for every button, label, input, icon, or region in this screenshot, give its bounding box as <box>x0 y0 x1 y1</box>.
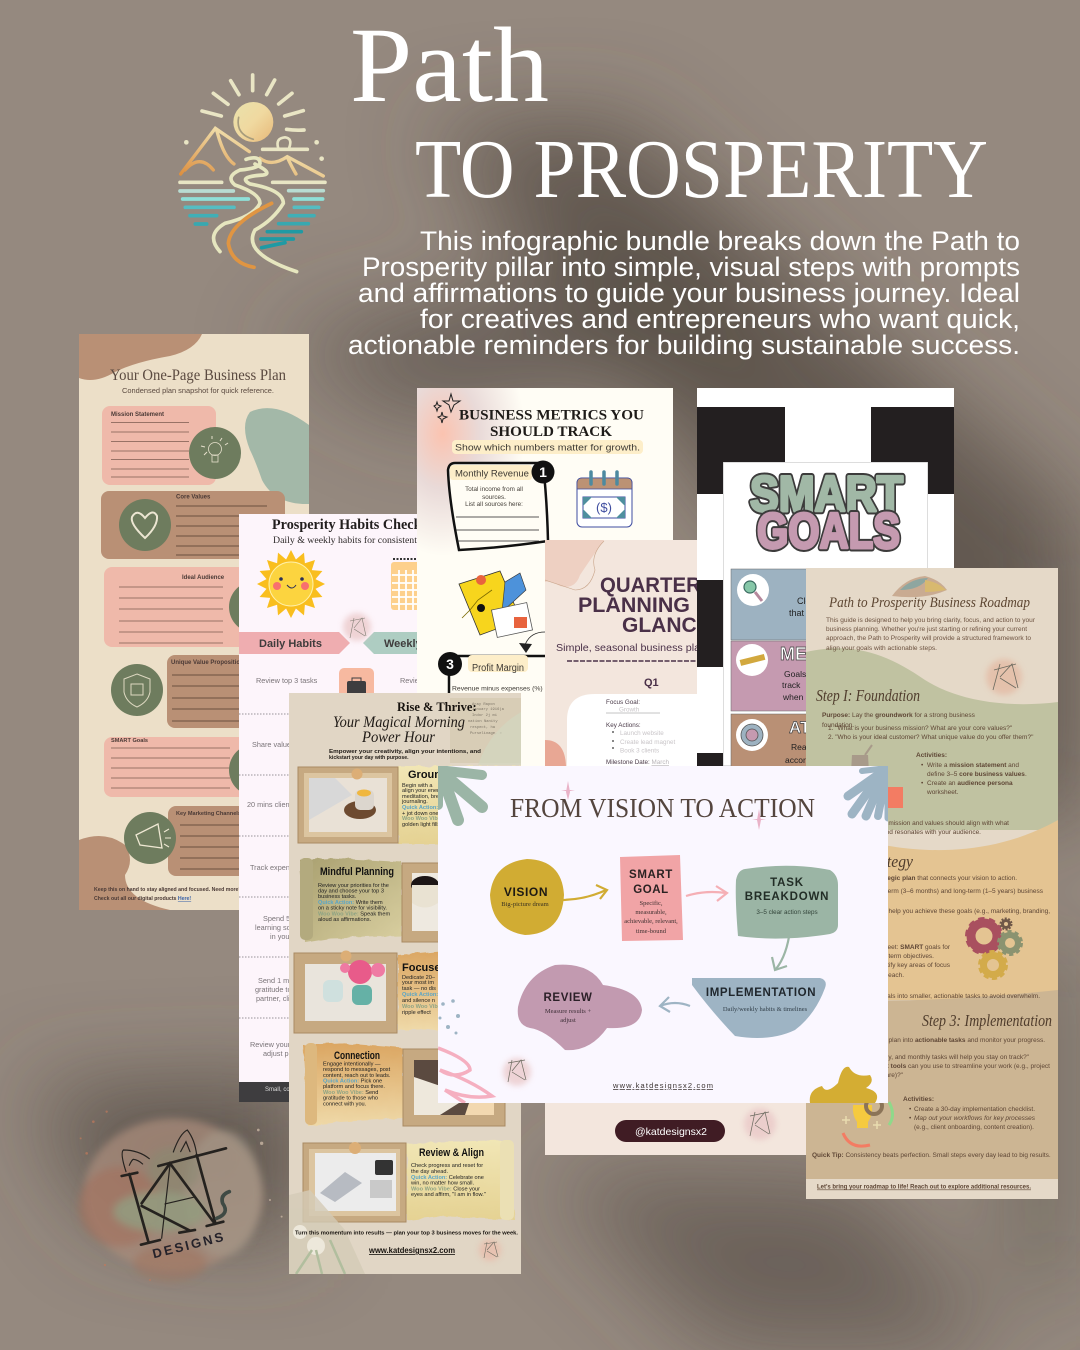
section: mindful planning <box>300 858 521 942</box>
roadmap introduction: approach, the Path to Prosperity will provide a structured framework to <box>826 635 1031 642</box>
vintage paper and leaf corner: respect, ha <box>470 725 496 730</box>
title: Path: Path <box>350 7 549 125</box>
arrow to step three <box>519 632 545 653</box>
intro paragraph <box>348 226 1020 360</box>
panel: business metrics you should track: BUSINESS METRICS YOU <box>459 408 644 424</box>
icon: smiling sun <box>257 550 325 618</box>
measurable row <box>730 640 806 712</box>
section: focused work: task — no dis <box>402 986 436 992</box>
section: review and align <box>303 1140 515 1222</box>
section: grounding: align your energy <box>402 788 445 794</box>
panel: one-page business plan: Your One-Page Business Plan <box>110 367 286 384</box>
heading: FROM VISION TO ACTION <box>510 793 815 823</box>
step 2 text: Set short-term (3–6 months) and long-term (1–5 years) business <box>858 888 1044 895</box>
section: review and align: Review & Align <box>419 1147 484 1159</box>
core values box: Core Values <box>176 494 211 500</box>
step 3 text <box>812 1037 1051 1159</box>
panel: business metrics you should track <box>417 388 673 714</box>
decorative blue dots <box>438 999 460 1034</box>
section: grounding: meditation, breath <box>402 794 447 800</box>
step: review: adjust <box>560 1017 576 1024</box>
step: vision: VISION <box>504 885 548 899</box>
metric 1: monthly revenue <box>448 460 554 550</box>
step 3 text: Purpose: Turn your plan into actionable tasks and monitor your progress. <box>831 1037 1045 1044</box>
heading <box>329 700 481 761</box>
smart goals box: SMART Goals <box>111 738 148 744</box>
panel: prosperity habits checklist: Prosperity Habits Checklist <box>272 517 440 533</box>
step 3 heading: Step 3: Implementation <box>922 1011 1052 1030</box>
step: smart goal: time-bound <box>636 928 667 935</box>
step: vision: Big-picture dream <box>501 901 549 908</box>
panel: rise and thrive morning power hour <box>289 693 521 1274</box>
heading: GLANCE <box>622 614 711 637</box>
section: connection: platform and focus there. <box>323 1084 385 1090</box>
section: grounding: Woo Woo Vibe: <box>402 816 443 822</box>
section: grounding: golden light fills <box>402 822 440 828</box>
watermark logo <box>343 613 371 641</box>
arrow: vision to smart goal <box>560 885 607 900</box>
roadmap footer link: Let's bring your roadmap to life! Reach out to explore additional resources. <box>817 1184 1031 1190</box>
metric 1: monthly revenue: sources. <box>482 494 506 501</box>
panel: black and white blocks <box>697 388 954 767</box>
habit list: learning something <box>255 923 317 932</box>
decorative green splash <box>438 770 482 820</box>
section: mindful planning: Review your priorities for the <box>318 883 389 889</box>
quarter details: Book 3 clients <box>620 748 659 754</box>
heading: Rise & Thrive: <box>397 700 477 714</box>
heading: SMART GOALS: GOALS <box>757 503 900 559</box>
section: focused work <box>294 950 521 1033</box>
core values box <box>101 491 285 559</box>
habit list: partner, client <box>256 994 300 1003</box>
heading: PLANNING <box>578 594 690 617</box>
habit list: Share value <box>252 740 291 749</box>
heading: SMART GOALS: SMART <box>750 466 903 522</box>
section: connection: respond to messages, post <box>323 1067 391 1073</box>
habit list: in your <box>270 932 292 941</box>
step 3 text: Map out your workflows for key processes <box>914 1115 1036 1122</box>
section: connection: Quick Action: Pick one <box>323 1078 382 1084</box>
panel: quarterly planning lower part <box>545 1100 806 1155</box>
section: focused work: ripple effect <box>402 1010 431 1016</box>
step: implementation: Daily/weekly habits & timelines <box>723 1006 808 1013</box>
mission statement box: Mission Statement <box>111 412 164 418</box>
section: grounding: Begin with a <box>402 783 433 789</box>
arrow: smart goal to task breakdown <box>686 886 727 901</box>
step 2 text: Identify key areas of focus <box>874 962 951 969</box>
step 1 text: Write a mission statement and <box>927 762 1019 769</box>
social handle pill <box>615 1120 725 1142</box>
section: grounding: + jot down one <box>402 811 439 817</box>
metric 1: monthly revenue: List all sources here: <box>465 501 523 508</box>
step 1 text: define 3–5 core business values. <box>927 771 1027 778</box>
step 2 text: long-term objectives. <box>874 953 934 960</box>
footer note: Keep this on hand to stay aligned and focused. Need more? <box>94 887 242 893</box>
vintage paper and leaf corner: Aray Rapon <box>472 702 495 707</box>
panel: quarterly planning at a glance <box>545 540 697 766</box>
arrow: implementation to review <box>660 997 690 1012</box>
section: grounding: Quick Action: <box>402 805 438 811</box>
step: smart goal: Specific, <box>640 900 663 907</box>
ideal audience box <box>104 567 239 647</box>
habit list: gratitude to a <box>255 985 299 994</box>
attainable row <box>730 714 806 766</box>
step 3 text: • <box>909 1115 912 1122</box>
step: smart goal <box>620 855 683 941</box>
attainable row: AT <box>789 718 811 737</box>
decorative pink scribble <box>438 1048 492 1103</box>
step: task breakdown <box>736 866 838 939</box>
intro paragraph: actionable reminders for building sustainable success. <box>348 330 1020 360</box>
heading: SMART GOALS <box>748 472 906 552</box>
step 2 text: Purpose: Create a strategic plan that connects your vision to action. <box>819 875 1017 882</box>
quarter details: Key Actions: <box>606 722 641 729</box>
heading: Your Magical Morning <box>333 714 465 731</box>
watermark logo <box>479 1239 501 1261</box>
quarter details <box>606 699 676 766</box>
section: connection: content, reach out to leads. <box>323 1073 391 1079</box>
panel: quarterly planning at a glance: Simple, seasonal business plan <box>556 642 706 654</box>
footer note: Check out all our digital products Here! <box>94 896 191 902</box>
weekly habits banner: Weekly Habits <box>384 638 458 650</box>
section: focused work: Dedicate 20– <box>402 975 436 981</box>
section: grounding <box>298 766 521 844</box>
icon: light bulb with arrows <box>842 1098 892 1146</box>
vintage paper and leaf corner: Indor 2j mi <box>472 713 498 718</box>
specific row: Clear <box>797 596 819 606</box>
habit list: Review your week <box>250 1040 310 1049</box>
section: connection <box>303 1043 505 1126</box>
step: smart goal: achievable, relevant, <box>624 918 678 925</box>
section: review and align: Woo Woo Vibe: Close your <box>411 1186 480 1192</box>
ideal audience box: Ideal Audience <box>182 575 225 581</box>
step 1 text: Purpose: Lay the groundwork for a strong business <box>822 712 976 719</box>
daily habits banner: Daily Habits <box>259 638 322 650</box>
decorative blue leaf <box>848 768 888 818</box>
section: mindful planning: Quick Action: Write them <box>318 900 383 906</box>
sparkles <box>434 394 460 423</box>
step 3 text: (e.g., client onboarding, content creation). <box>914 1124 1034 1131</box>
step 1 text: 1. "What is your business mission? What are your core values?" <box>828 725 1013 732</box>
heading: SMART GOALS: SMART <box>750 466 903 522</box>
habit list: Review top 3 tasks <box>256 676 318 685</box>
intro paragraph: for creatives and entrepreneurs who want quick, <box>420 304 1020 334</box>
quarter details: Growth <box>619 706 640 714</box>
illustration: clipboard with charts <box>459 571 533 637</box>
title: TO PROSPERITY: TO PROSPERITY <box>415 123 988 216</box>
habit list: Spend 5 <box>263 914 290 923</box>
step 1 text: 2. "Who is your ideal customer? What unique value do you offer them?" <box>828 734 1034 741</box>
specific row <box>730 568 806 640</box>
icon: megaphone <box>124 812 176 864</box>
metric 1: monthly revenue: Total income from all <box>465 486 523 493</box>
watermark logo <box>986 659 1022 695</box>
step 1 text <box>822 712 1034 836</box>
habit list <box>247 678 417 1058</box>
step 2 text: Create a goal sheet: SMART goals for <box>840 944 951 951</box>
icon: shield <box>111 664 163 716</box>
intro paragraph: Prosperity pillar into simple, visual steps with prompts <box>362 252 1020 282</box>
attainable row: accor <box>785 755 806 765</box>
section: review and align: Check progress and reset for <box>411 1163 483 1169</box>
section: focused work: Quick Action: <box>402 992 438 998</box>
section: mindful planning: on a sticky note for visibility. <box>318 906 387 912</box>
watermark logo <box>503 1058 531 1086</box>
metric 3: profit margin: Profit Margin <box>472 663 524 674</box>
panel: business metrics you should track: SHOULD TRACK <box>490 424 612 440</box>
section: grounding: Grounding <box>408 769 464 781</box>
website link: www.katdesignsx2.com <box>368 1246 455 1255</box>
vintage paper and leaf corner <box>450 698 521 765</box>
step 1 heading: Step I: Foundation <box>816 686 920 705</box>
section: mindful planning: aloud as affirmations. <box>318 917 372 923</box>
arrow: task breakdown to implementation <box>772 930 790 970</box>
quarter details: Create lead magnet <box>620 739 676 746</box>
step: task breakdown: BREAKDOWN <box>745 891 829 903</box>
icon: briefcase <box>339 668 374 693</box>
step 2 text: for each. <box>879 972 904 979</box>
heading: kickstart your day with purpose. <box>329 755 409 761</box>
metric 3: profit margin: 3 <box>446 656 454 672</box>
roadmap heading: Path to Prosperity Business Roadmap <box>828 595 1030 611</box>
step 2 text: What strategies will help you achieve these goals (e.g., marketing, branding, <box>831 908 1050 915</box>
step: vision <box>490 859 564 935</box>
section: review and align: the day ahead. <box>411 1169 448 1175</box>
section: mindful planning: business tasks. <box>318 894 357 900</box>
logo: KAT Designs with watercolour splash <box>78 1110 283 1282</box>
metric 3: profit margin: Revenue minus expenses (%) <box>452 686 543 692</box>
roadmap introduction: business planning. Whether you're just starting or refining your current <box>826 626 1027 633</box>
step: review: Measure results + <box>545 1008 591 1015</box>
step 1 text: you offer and resonates with your audience. <box>855 829 981 836</box>
panel: from vision to action <box>438 766 888 1103</box>
step 3 text: Create a 30-day implementation checklist. <box>914 1106 1035 1113</box>
habit list: Send 1 msg <box>258 976 297 985</box>
icon: heart <box>132 512 157 538</box>
heading <box>579 578 697 632</box>
measurable row: ME <box>780 644 807 664</box>
key marketing channels box <box>168 806 239 876</box>
mission statement box <box>102 406 216 485</box>
step 1 text: Activities: <box>916 752 947 759</box>
sparkles <box>561 781 766 830</box>
decorative gold splash <box>810 1067 877 1103</box>
step: smart goal: measurable, <box>635 909 667 916</box>
section: focused work: your most im <box>402 980 434 986</box>
panel: one-page business plan: Condensed plan snapshot for quick reference. <box>122 386 274 395</box>
section: connection: Woo Woo Vibe: Send <box>323 1090 378 1096</box>
habit list: Review goals <box>400 676 444 685</box>
vintage paper and leaf corner: nation Nanity <box>468 719 498 724</box>
step 3 text: • <box>909 1106 912 1113</box>
step 1 text: • <box>921 762 924 769</box>
quarter details: Focus Goal: <box>606 699 640 706</box>
quarter details: Launch website <box>620 730 664 737</box>
step: implementation: IMPLEMENTATION <box>706 987 816 999</box>
step: implementation <box>692 978 826 1038</box>
step 2 text <box>819 875 1050 1000</box>
panel: prosperity habits checklist: Daily & weekly habits for consistent growth <box>273 535 447 546</box>
measurable row: Goals <box>784 669 806 679</box>
roadmap introduction: This guide is designed to help you bring clarity, focus, and action to your <box>826 617 1036 624</box>
weekly habits banner <box>363 632 417 654</box>
section: review and align: win, no matter how small. <box>410 1180 475 1186</box>
step: smart goal: SMART <box>629 869 673 881</box>
section: focused work: and silence n <box>402 998 435 1004</box>
unique value proposition box <box>167 655 239 728</box>
section: connection: Connection <box>334 1050 380 1062</box>
icon: calendar <box>391 558 417 610</box>
step: task breakdown: TASK <box>770 877 804 889</box>
icon: coffee tool <box>850 745 903 808</box>
panel: path to prosperity business roadmap <box>806 568 1058 1199</box>
icon: light bulb <box>189 427 241 479</box>
step 2 heading: Step 2: Strategy <box>813 852 913 871</box>
intro paragraph: and affirmations to guide your business journey. Ideal <box>358 278 1020 308</box>
section: focused work: Woo Woo Vibe: <box>402 1004 443 1010</box>
floral decoration <box>289 1190 365 1274</box>
panel: prosperity habits checklist <box>239 514 417 1102</box>
panel: quarterly planning at a glance: Q1 <box>644 677 659 689</box>
measurable row: track <box>782 680 801 690</box>
section: mindful planning: day and choose your top 3 <box>318 888 384 894</box>
heading: Empower your creativity, align your intentions, and <box>329 749 481 755</box>
step 3 text: management software)?" <box>831 1072 904 1079</box>
measurable row: when <box>782 692 804 702</box>
website link: www.katdesignsx2.com <box>612 1081 713 1090</box>
heading: Power Hour <box>361 729 436 746</box>
logo: KAT Designs with watercolour splash: DESIGNS <box>151 1229 227 1261</box>
footer note <box>94 887 242 902</box>
metric 1: monthly revenue: 1 <box>539 464 547 480</box>
step 1 text: • <box>921 780 924 787</box>
section: mindful planning: Woo Woo Vibe: Speak them <box>318 912 390 918</box>
section: review and align: eyes and affirm, "I am in flow." <box>411 1192 486 1198</box>
step 1 text: worksheet. <box>926 789 959 796</box>
intro paragraph: This infographic bundle breaks down the Path to <box>420 226 1020 256</box>
step 3 text: What tools can you use to streamline your work (e.g., project <box>874 1063 1050 1070</box>
panel: business metrics you should track: Show which numbers matter for growth. <box>455 442 640 454</box>
habit list: 20 mins client <box>247 800 292 809</box>
step 1 text: Your mission and values should align with what <box>873 820 1009 827</box>
quarter details: Milestone Date: March <box>606 759 669 766</box>
attainable row: Real <box>791 742 809 752</box>
step 2 text: Break goals into smaller, actionable tasks to avoid overwhelm. <box>861 993 1040 1000</box>
roadmap introduction <box>826 617 1036 652</box>
panel: smart goals <box>723 462 928 774</box>
step 3 text: Quick Tip: Consistency beats perfection. Small steps every day lead to big results. <box>812 1152 1051 1159</box>
section: grounding: journaling. <box>401 799 428 805</box>
icon: dollar calendar: ($) <box>596 500 612 515</box>
section: review and align: Quick Action: Celebrate one <box>411 1175 484 1181</box>
heading: SMART GOALS: GOALS <box>757 503 900 559</box>
metric 3: profit margin <box>438 652 545 693</box>
habit list: adjust plan <box>263 1049 298 1058</box>
section: connection: gratitude to those who <box>323 1096 378 1102</box>
metric 1: monthly revenue: Monthly Revenue <box>455 468 529 480</box>
step: smart goal: GOAL <box>633 884 669 896</box>
specific row: that <box>789 608 805 618</box>
step: review: REVIEW <box>544 992 592 1004</box>
key marketing channels box: Key Marketing Channels <box>176 811 241 817</box>
step: review <box>518 965 642 1050</box>
heading: QUARTERLY <box>600 574 725 597</box>
roadmap introduction: align your goals with actionable steps. <box>826 645 937 652</box>
icon: dollar calendar <box>577 472 632 527</box>
section: focused work: Focused <box>402 962 447 974</box>
vintage paper and leaf corner: January 1916(a <box>472 707 505 712</box>
icon: gears <box>968 918 1021 978</box>
daily habits banner <box>239 632 350 654</box>
section: connection: connect with you. <box>323 1102 367 1108</box>
step 3 text: Activities: <box>903 1096 934 1103</box>
watermark logo <box>744 1108 776 1140</box>
step 3 text: What daily, weekly, and monthly tasks will help you stay on track?" <box>838 1054 1030 1061</box>
panel: one-page business plan <box>79 334 309 910</box>
step: task breakdown: 3–5 clear action steps <box>756 909 818 916</box>
panel: prosperity habits checklist: Small, consistent habits <box>265 1087 328 1093</box>
logo: path to prosperity sun, mountains and river <box>180 75 325 272</box>
icon: feather <box>892 576 947 597</box>
step 1 text: foundation. <box>822 722 854 729</box>
section: connection: Engage intentionally — <box>323 1062 381 1068</box>
smart goals box <box>104 737 239 797</box>
habit list: Track expenses <box>250 863 302 872</box>
closing call to action: Turn this momentum into results — plan your top 3 business moves for the week. <box>295 1230 518 1236</box>
social handle pill: @katdesignsx2 <box>635 1126 707 1138</box>
unique value proposition box: Unique Value Proposition <box>171 660 244 666</box>
step 1 text: Create an audience persona <box>927 780 1013 787</box>
section: mindful planning: Mindful Planning <box>320 866 394 878</box>
vintage paper and leaf corner: Purselinage, e <box>470 731 503 736</box>
